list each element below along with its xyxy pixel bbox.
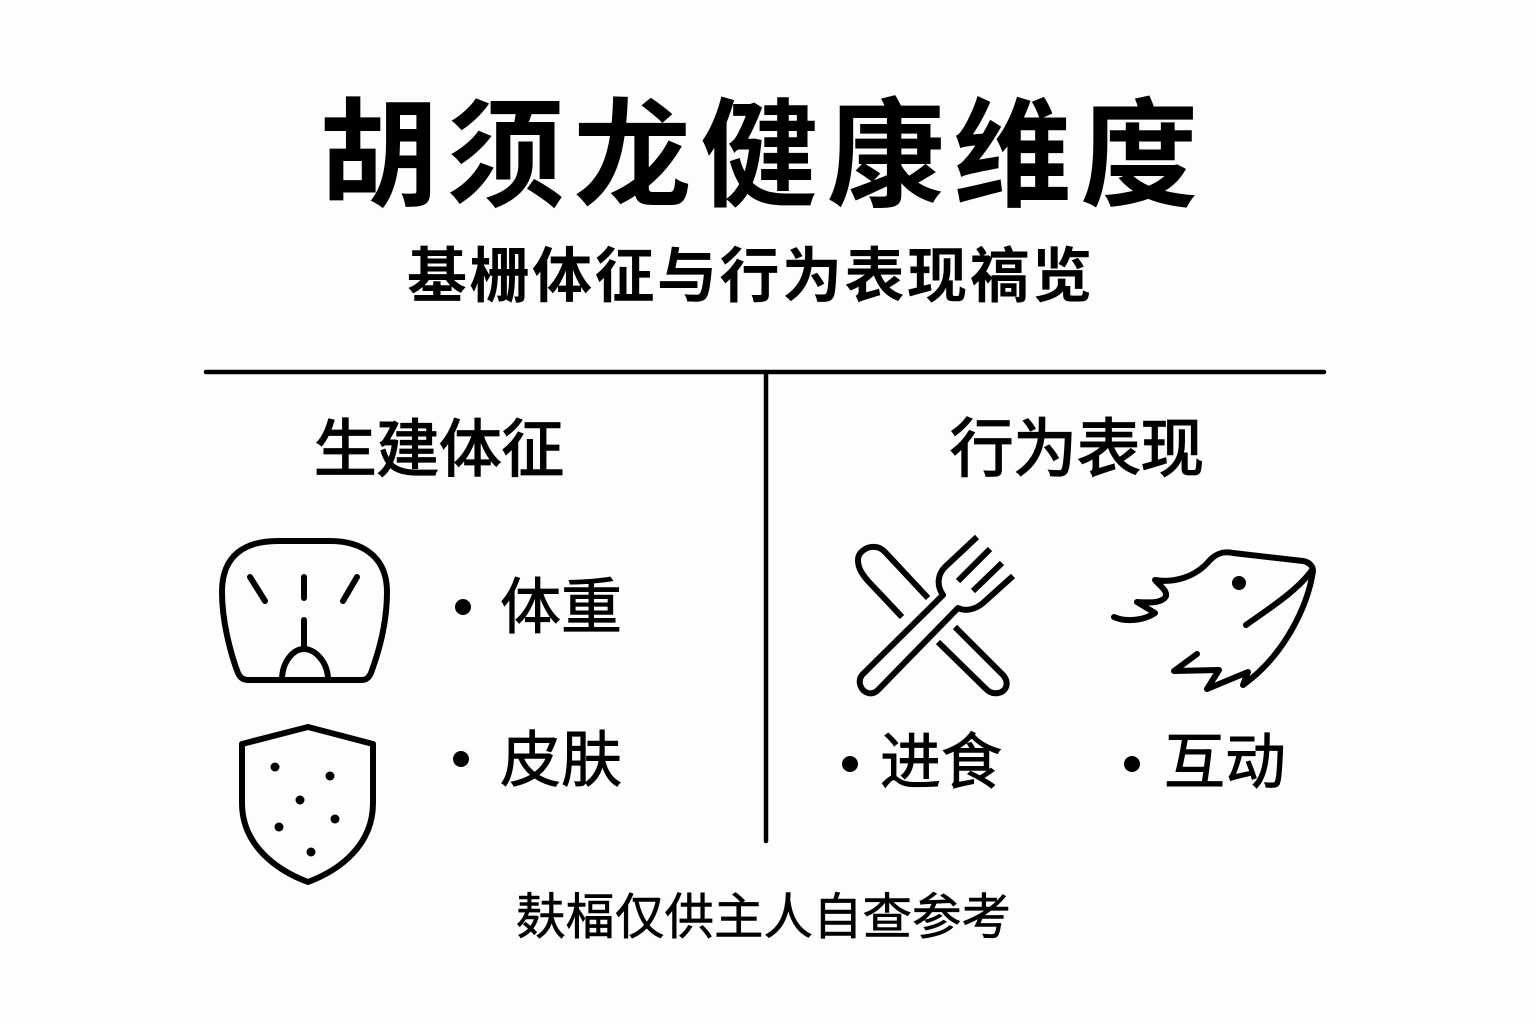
label: interaction: 互动 <box>1164 728 1286 796</box>
subtitle: 基栅体征与行为表现禞览 <box>407 243 1094 310</box>
icon: bearded dragon head <box>1114 552 1313 689</box>
label: weight: 体重 <box>500 573 622 641</box>
icon: scale <box>222 541 387 680</box>
panel: physical signs <box>222 415 622 882</box>
title: 胡须龙健康维度 <box>320 91 1207 223</box>
footer note: 麸楅仅供主人自查参考 <box>516 890 1011 945</box>
icon: skin shield <box>242 727 373 882</box>
panel: behavior <box>842 415 1313 796</box>
label: eating: 进食 <box>880 728 1002 796</box>
horizontal divider <box>206 370 1324 374</box>
vertical divider <box>764 375 768 841</box>
icon: knife and fork <box>858 537 1013 693</box>
heading: behavior: 行为表现 <box>950 415 1204 485</box>
label: skin: 皮肤 <box>500 726 622 794</box>
heading: physical signs: 生建体征 <box>314 415 564 485</box>
